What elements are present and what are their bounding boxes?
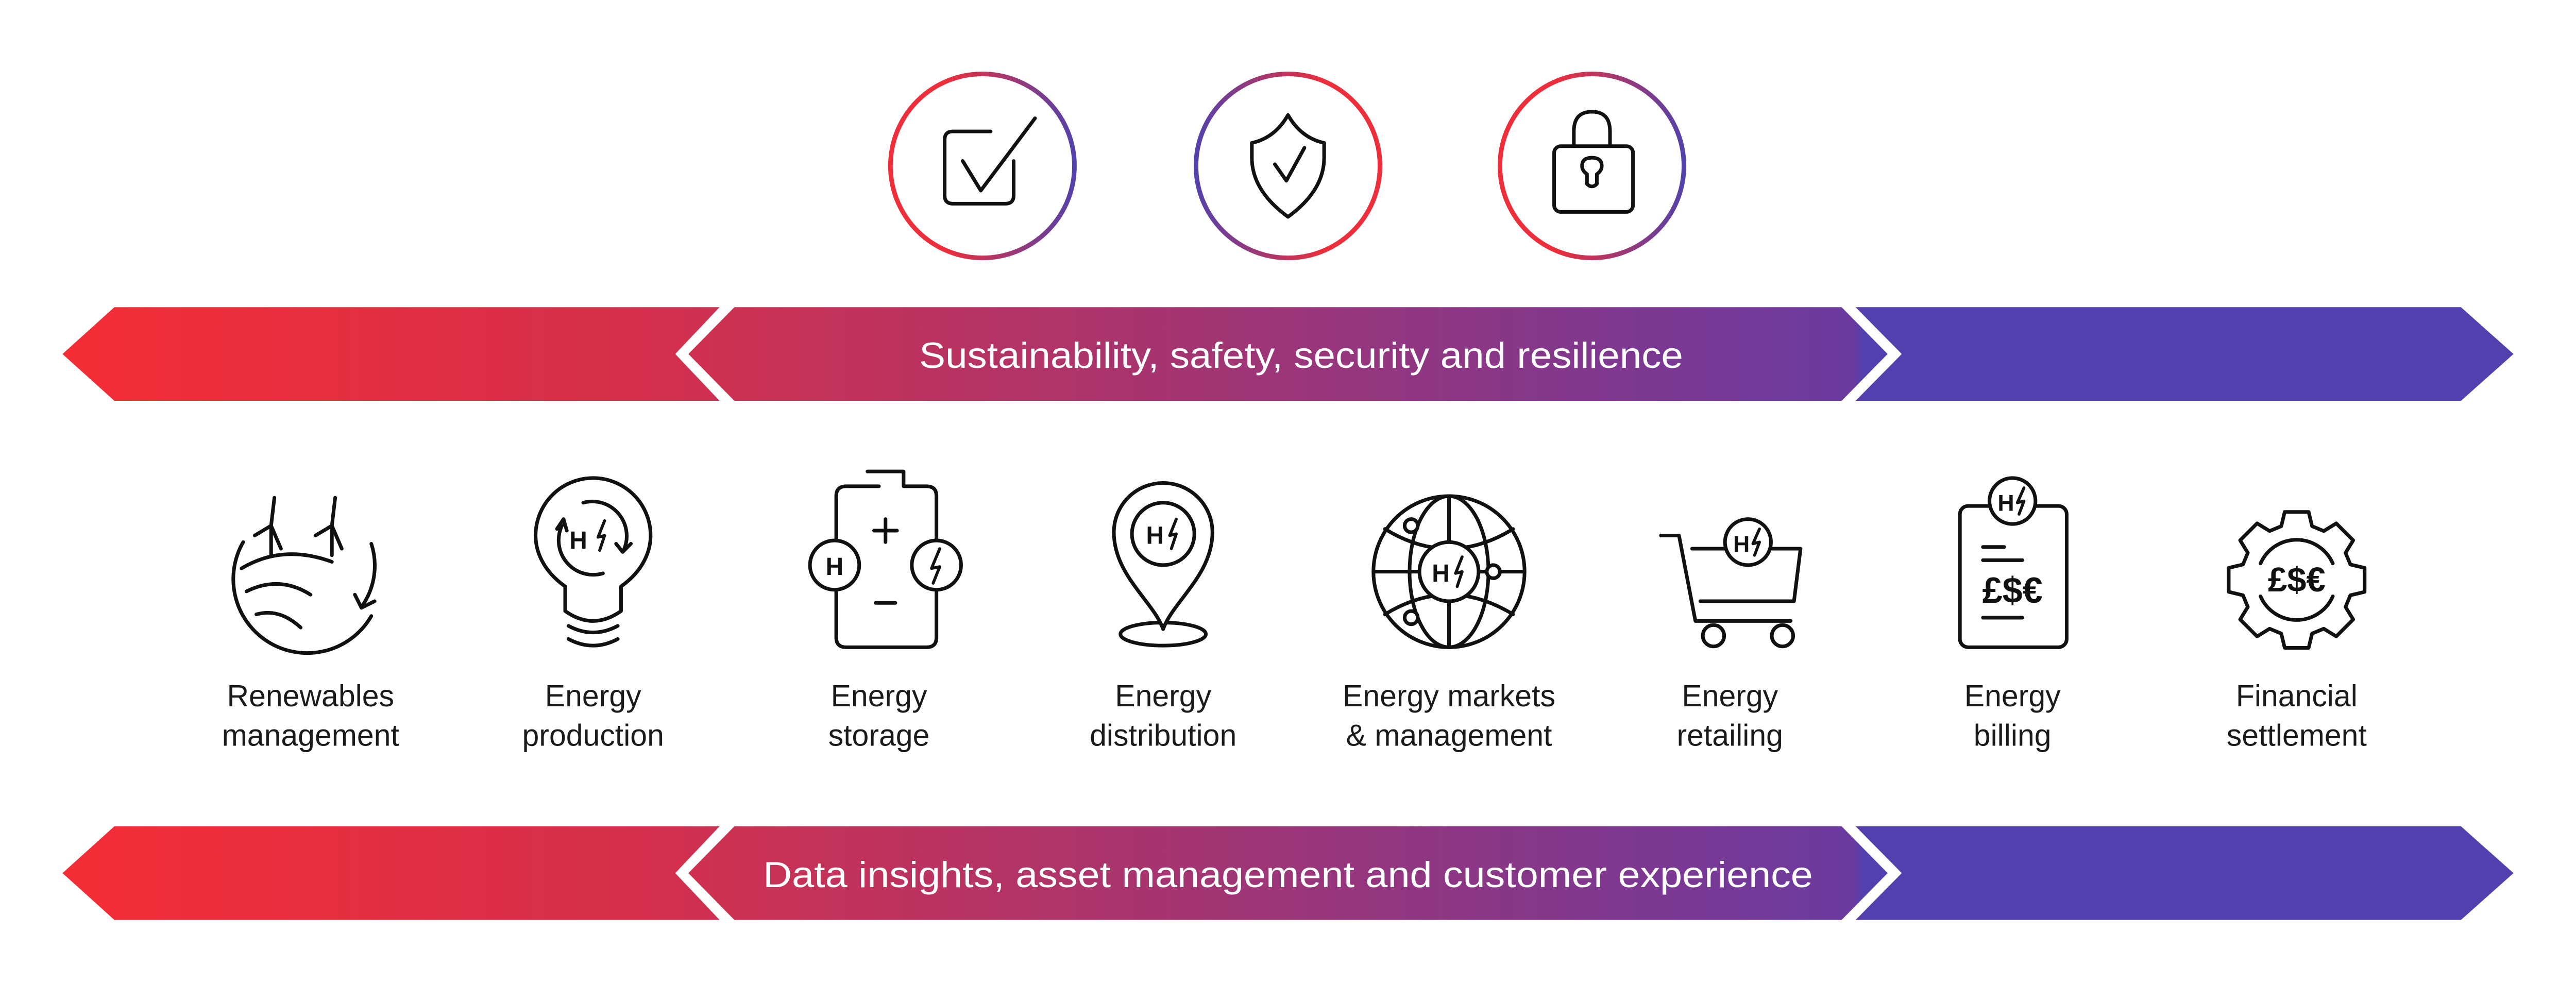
band text: Data insights, asset management and customer experience: [763, 854, 1813, 895]
icon: renewables management: [233, 498, 375, 653]
label: renewables management: management: [222, 719, 399, 753]
icon: energy storage: [810, 471, 961, 647]
label: financial settlement: Financial: [2236, 680, 2358, 713]
icon circle: shield: [1196, 74, 1380, 258]
label: energy storage: storage: [828, 719, 929, 753]
icon circle: padlock: [1500, 74, 1684, 258]
label: energy retailing: Energy: [1682, 680, 1778, 713]
label: energy markets: & management: [1346, 719, 1552, 753]
icon: financial settlement: [2229, 512, 2365, 648]
label: financial settlement: settlement: [2227, 719, 2367, 753]
icon: energy billing: £$€: [1982, 570, 2043, 610]
label: energy storage: Energy: [831, 680, 927, 713]
band text: Sustainability, safety, security and resilience: [919, 335, 1683, 376]
icon: energy retailing: [1661, 519, 1801, 647]
label: renewables management: Renewables: [227, 680, 394, 713]
icon: energy retailing: H: [1733, 532, 1750, 557]
label: energy distribution: distribution: [1090, 719, 1236, 753]
label: energy production: Energy: [545, 680, 641, 713]
label: energy retailing: retailing: [1676, 719, 1783, 753]
icon: energy billing: H: [1997, 491, 2014, 516]
icon: financial settlement: £$€: [2268, 561, 2326, 599]
label: energy markets: Energy markets: [1343, 680, 1555, 713]
label: energy billing: Energy: [1964, 680, 2061, 713]
icon: energy billing: [1960, 478, 2066, 647]
icon: energy distribution: H: [1146, 522, 1164, 549]
label: energy production: production: [522, 719, 664, 753]
label: energy billing: billing: [1974, 719, 2052, 753]
icon: energy markets: H: [1432, 560, 1450, 587]
icon: energy storage: H: [826, 553, 843, 581]
label: energy distribution: Energy: [1115, 680, 1211, 713]
icon: energy production: [536, 478, 651, 646]
icon: energy markets: [1374, 496, 1524, 647]
icon: energy production: H: [569, 527, 587, 554]
icon circle: checkbox: [890, 74, 1074, 258]
band: data insights: [62, 826, 2514, 920]
icon: energy distribution: [1114, 483, 1212, 646]
band: sustainability: [62, 307, 2514, 401]
